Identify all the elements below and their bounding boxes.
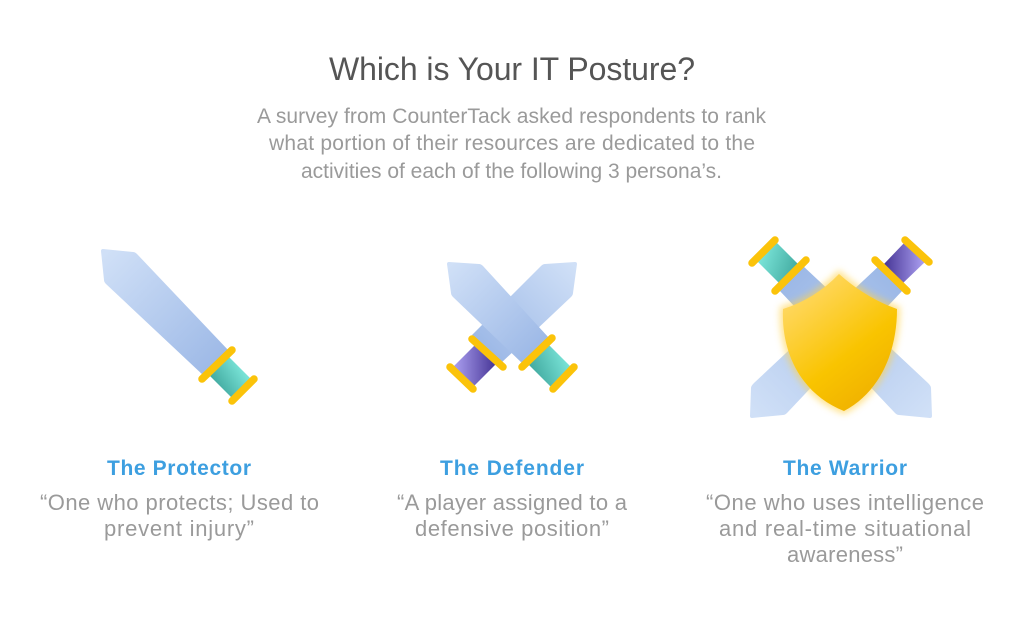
icon: protector sword: [101, 249, 254, 401]
panel: the defender: [397, 457, 628, 541]
intro text: activities of each of the following 3 persona’s.: [301, 160, 722, 183]
heading: the defender: The Defender: [440, 457, 584, 480]
icon: defender crossed swords: [447, 262, 577, 389]
intro text: what portion of their resources are dedicated to the: [268, 132, 755, 155]
panel: the protector: [40, 457, 319, 541]
quote: the warrior: and real-time situational: [719, 516, 971, 541]
shield glow: [783, 274, 897, 411]
quote: the defender: defensive position”: [415, 516, 609, 541]
title: Which is Your IT Posture?: [329, 51, 695, 87]
quote: the protector: [40, 490, 319, 541]
quote: the defender: “A player assigned to a: [397, 490, 628, 515]
quote: the warrior: [706, 490, 984, 567]
intro text: A survey from CounterTack asked respondents to rank: [257, 105, 766, 128]
shield: [783, 274, 897, 411]
intro text: [257, 105, 766, 183]
quote: the protector: prevent injury”: [104, 516, 254, 541]
quote: the defender: [397, 490, 628, 541]
icon: warrior swords and shield: [750, 240, 932, 418]
heading: the protector: The Protector: [107, 457, 251, 480]
heading: the warrior: The Warrior: [783, 457, 907, 480]
quote: the warrior: awareness”: [787, 542, 903, 567]
quote: the protector: “One who protects; Used to: [40, 490, 319, 515]
panel: the warrior: [706, 457, 984, 567]
quote: the warrior: “One who uses intelligence: [706, 490, 984, 515]
